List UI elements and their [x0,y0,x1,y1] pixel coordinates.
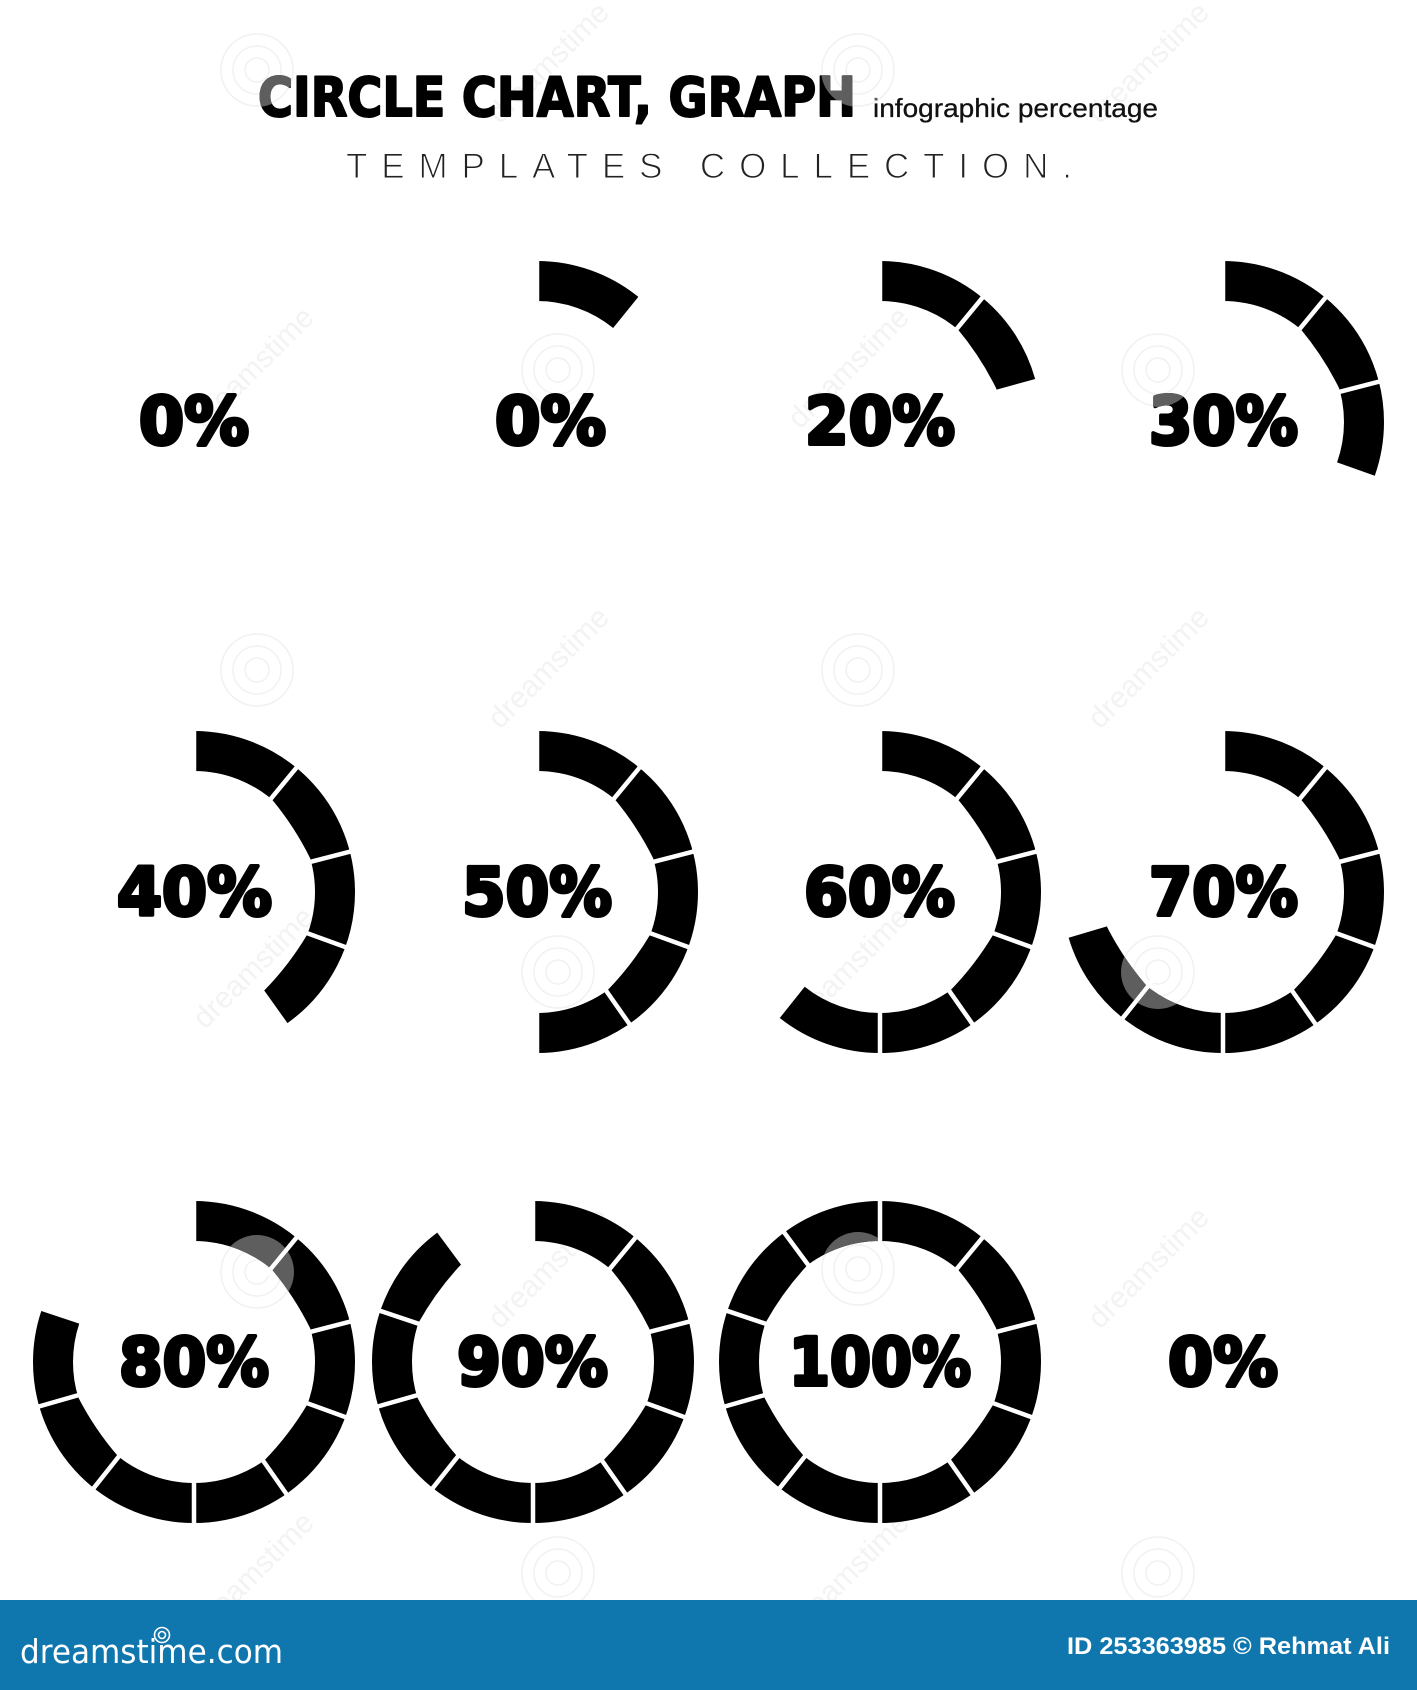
text: dreamstime [782,901,916,1035]
label: 30%: 30% [1149,383,1298,460]
chart: 90% ring [370,1192,698,1532]
label: 0%: 0% [139,383,249,460]
chart: 100% ring [717,1192,1045,1532]
subtitle: infographic percentage: infographic percentage [873,93,1158,123]
brand: dreamstime.com: dreamstime.com [20,1632,283,1671]
credit: image ID and author: ID 253363985 © Rehmat Ali [1067,1633,1390,1660]
icon: dreamstime spiral [154,1628,170,1642]
title: CIRCLE CHART, GRAPH [258,66,856,129]
chart: second 0% ring, one segment [396,252,678,563]
text: dreamstime [782,301,916,435]
label: 50%: 50% [462,854,612,931]
label: 60%: 60% [804,854,955,931]
label: 0%: 0% [495,383,606,460]
text: dreamstime [187,901,321,1035]
label: 20%: 20% [805,383,955,460]
chart: 50% ring [396,722,702,1062]
label: 80%: 80% [119,1324,269,1401]
chart: 30% ring [1082,252,1388,563]
chart: 60% ring [739,722,1045,1062]
chart: 20% ring [739,252,1021,563]
footer banner [0,1600,1417,1690]
label: 90%: 90% [457,1324,608,1401]
text: dreamstime [782,1506,916,1640]
text: dreamstime [187,1506,321,1640]
text: dreamstime [1082,601,1216,735]
label: 40%: 40% [117,854,272,931]
text: dreamstime [187,301,321,435]
chart: 70% ring [1082,722,1388,1062]
text: dreamstime [482,1201,616,1335]
text: dreamstime [1082,1201,1216,1335]
label: 70%: 70% [1149,854,1298,931]
label: 0%: 0% [1168,1324,1278,1401]
chart: 80% ring [31,1192,359,1532]
label: 100%: 100% [789,1324,971,1401]
chart: 40% ring [53,722,359,1033]
subtitle: templates collection: TEMPLATES COLLECTION. [346,147,1072,186]
text: dreamstime [482,601,616,735]
